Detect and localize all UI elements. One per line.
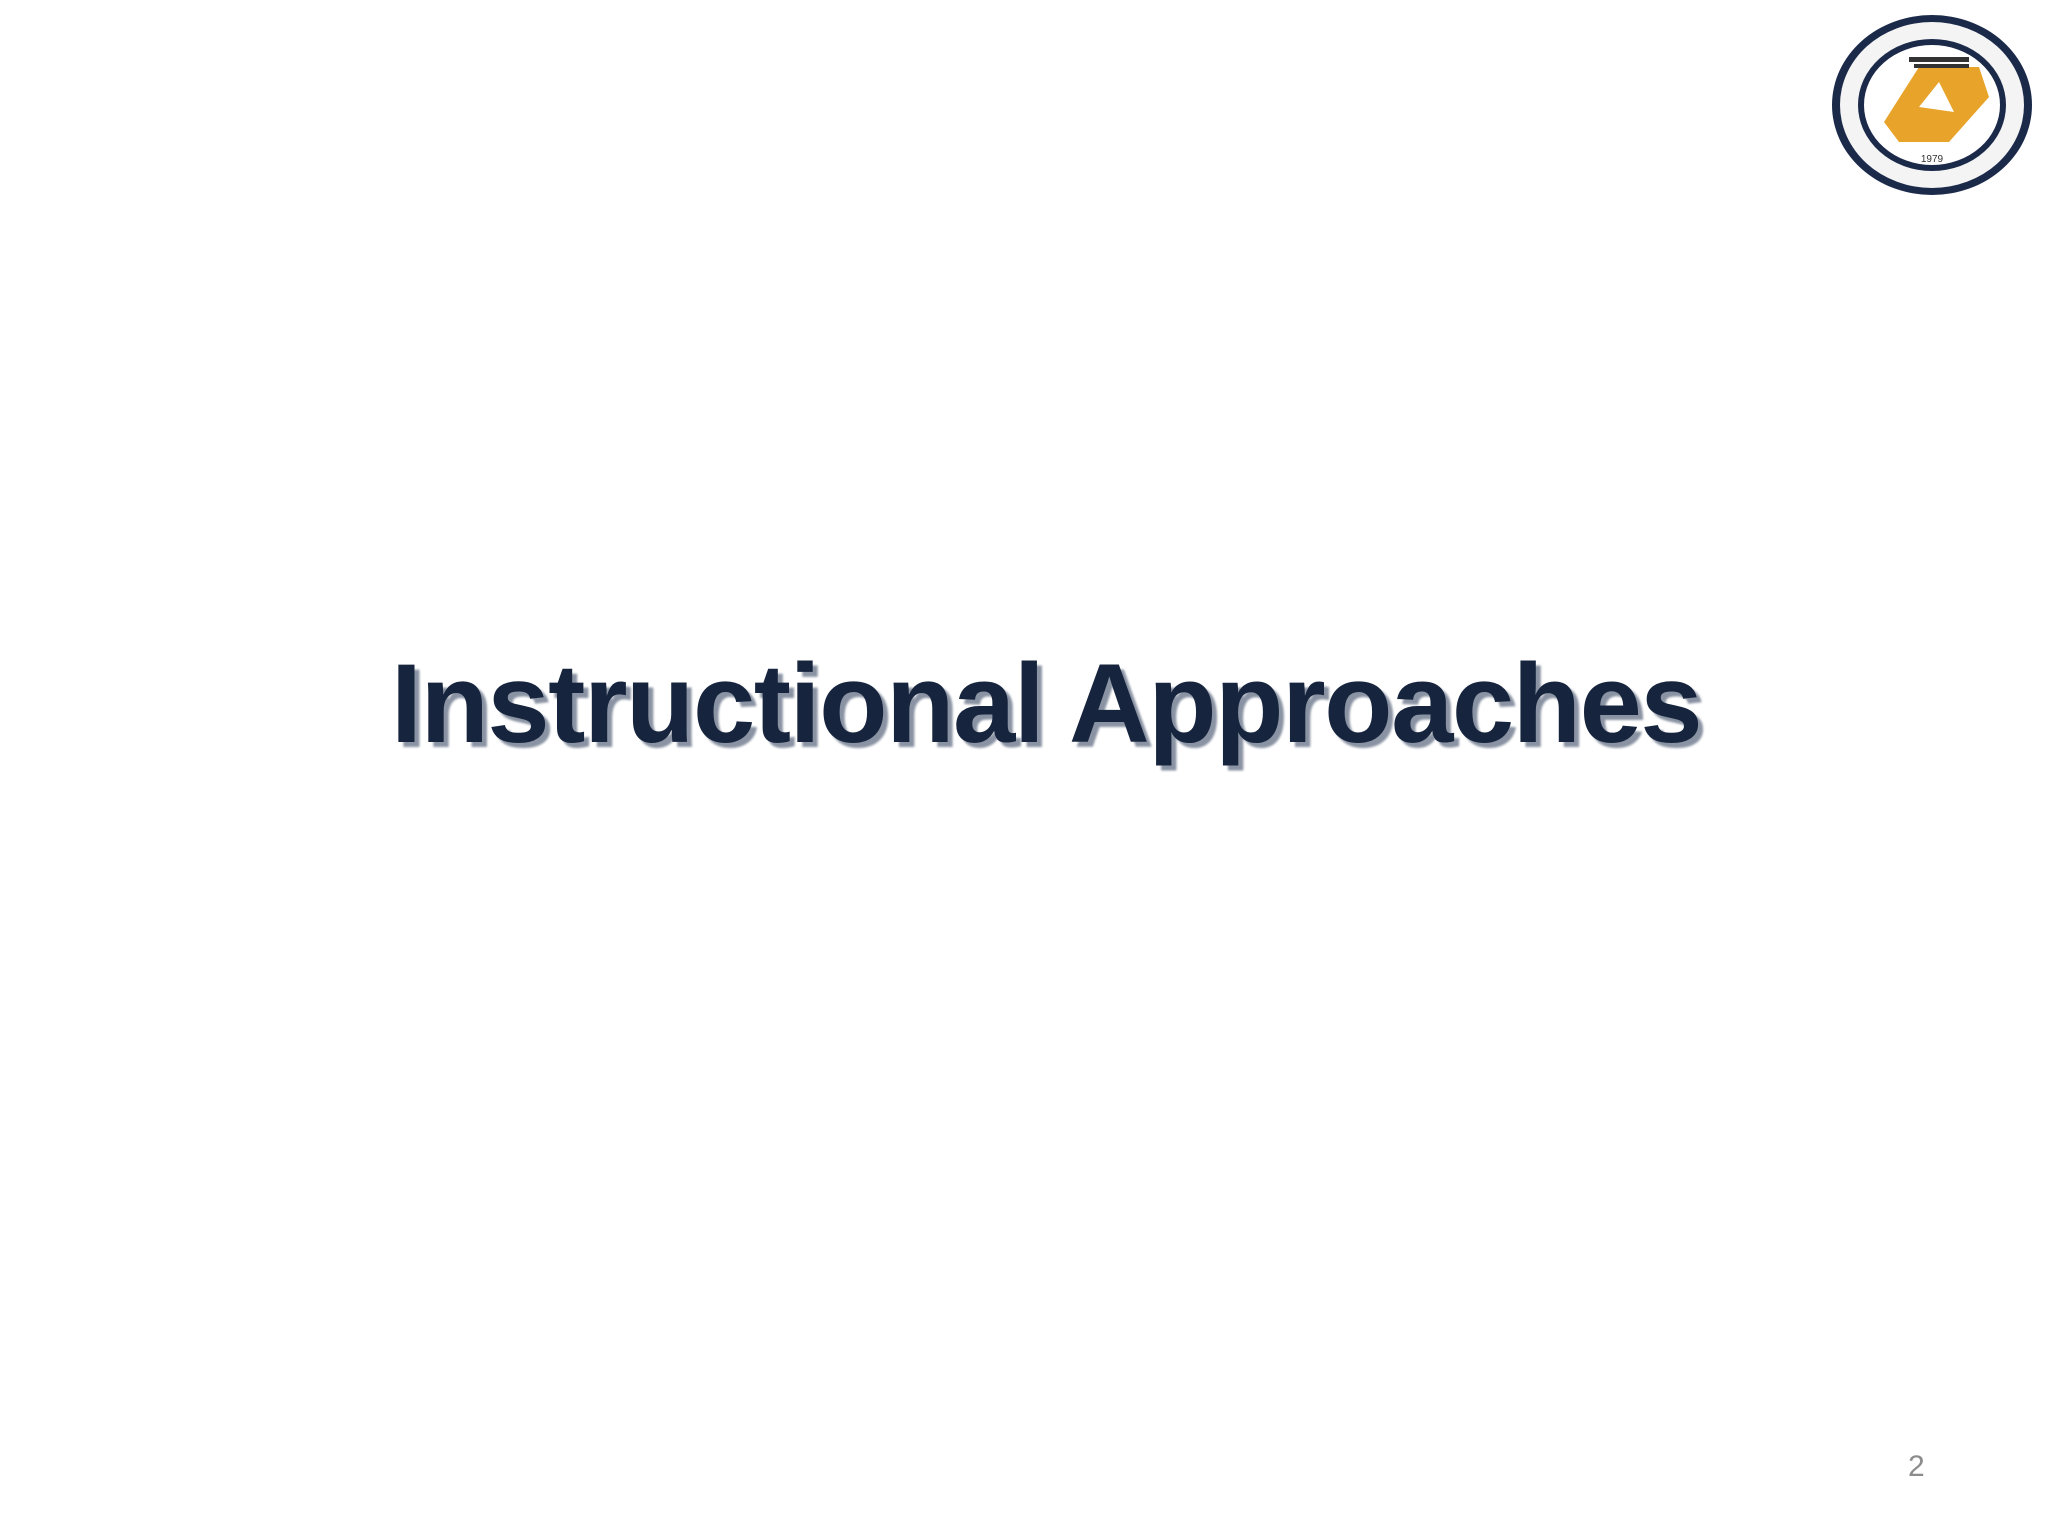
logo: university seal: 1979 <box>1921 154 1944 165</box>
logo: university seal <box>1832 15 2032 195</box>
title: Instructional Approaches <box>391 641 1701 766</box>
page number: 2 <box>1908 1450 1925 1483</box>
